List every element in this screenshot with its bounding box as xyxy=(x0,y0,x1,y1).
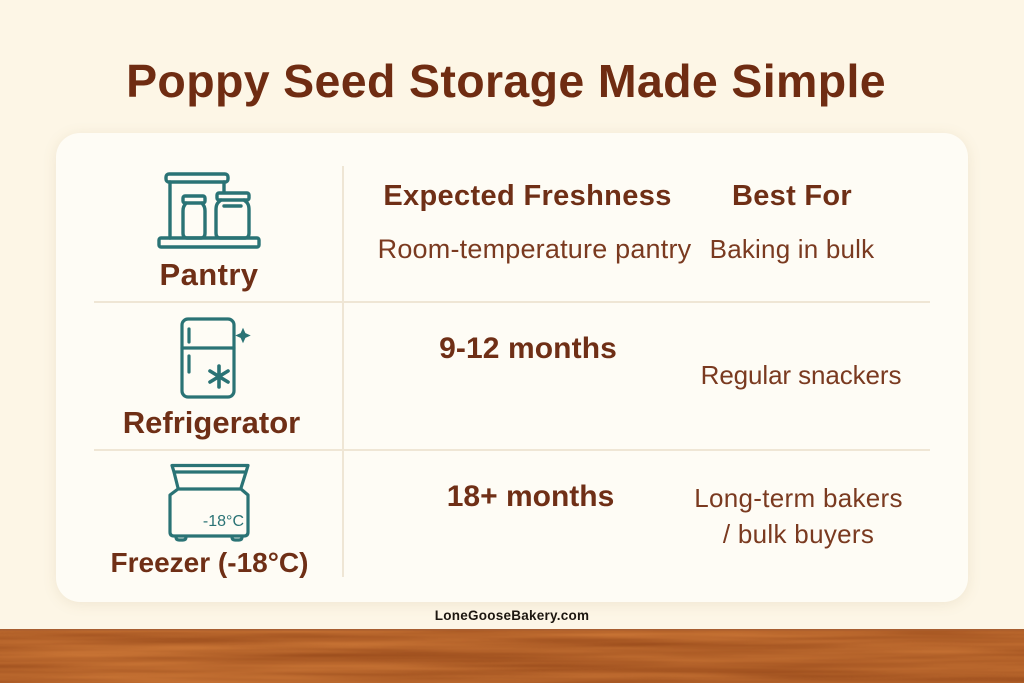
expected freshness heading: Expected Freshness xyxy=(383,180,672,212)
refrigerator label: Refrigerator xyxy=(123,405,300,440)
title: Poppy Seed Storage Made Simple xyxy=(126,55,886,107)
freezer label: Freezer (-18°C) xyxy=(111,547,308,578)
pantry label: Pantry xyxy=(160,257,258,292)
freezer best for: Long-term bakers xyxy=(694,483,903,513)
wood shelf xyxy=(0,629,1024,683)
pantry freshness: Room-temperature pantry xyxy=(378,234,691,264)
refrigerator best for: Regular snackers xyxy=(701,360,901,390)
freezer icon xyxy=(168,464,250,542)
freezer best for xyxy=(694,483,903,549)
refrigerator freshness: 9-12 months xyxy=(439,332,617,365)
freezer best for: / bulk buyers xyxy=(723,519,874,549)
freezer freshness: 18+ months xyxy=(447,480,614,513)
website credit: LoneGooseBakery.com xyxy=(435,608,589,623)
refrigerator icon xyxy=(180,317,251,399)
freezer icon: -18°C xyxy=(203,513,244,530)
best for heading: Best For xyxy=(732,180,852,212)
pantry icon xyxy=(157,172,261,249)
panel: storage table xyxy=(56,133,968,602)
pantry best for: Baking in bulk xyxy=(710,234,874,264)
